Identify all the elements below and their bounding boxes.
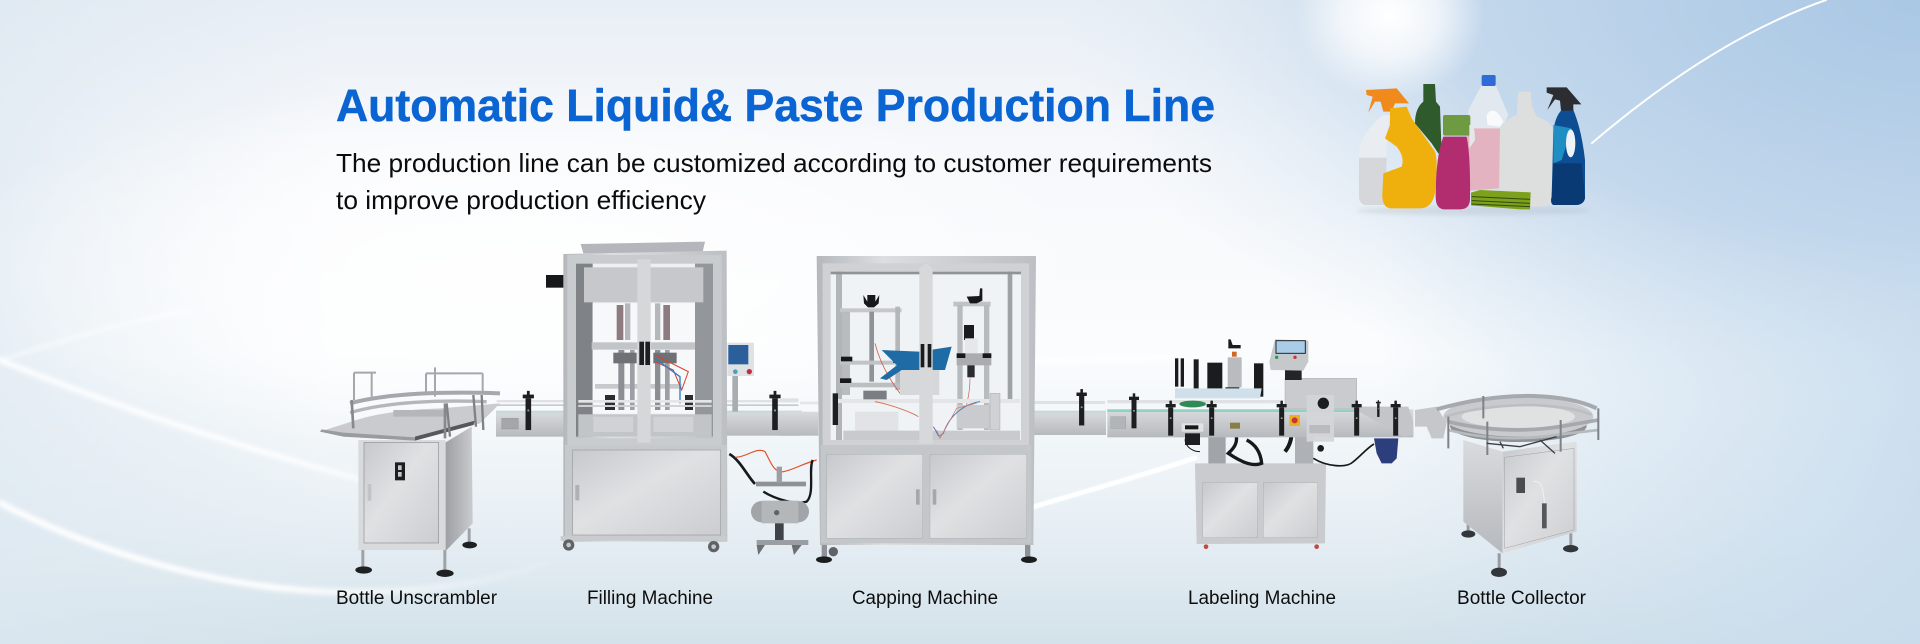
blue hopper [880,347,952,395]
label: bottle collector: Bottle Collector [1457,588,1587,609]
guide assembly [1307,395,1334,452]
door frame [572,259,717,443]
cabinet [1463,440,1577,553]
clamps [1129,393,1401,436]
machine: filling machine [496,242,817,555]
cabinet front [358,440,446,550]
infeed conveyor [496,391,566,437]
legs and feet [355,528,477,577]
pink jug [1467,75,1508,191]
hopper lid [581,242,705,253]
cabinet [1195,463,1326,549]
right capping head [953,288,991,430]
outfeed conveyor [727,391,802,436]
base columns [1208,437,1226,473]
hoses [1185,413,1374,466]
bottle shadow [1357,206,1590,215]
door frame [827,267,1025,444]
touch screen [1269,339,1308,380]
hopper [584,267,703,302]
machine: labeling machine [1107,339,1413,549]
stub conveyor [780,398,818,436]
label heads [1175,339,1263,407]
subtitle: to improve production efficiency [336,185,706,215]
wheels [561,536,727,552]
magenta bottle [1436,115,1475,209]
hoses and diaphragm pump [729,450,817,555]
lower cabinet [565,445,727,540]
frame [817,256,1036,545]
table and rails [833,391,1020,441]
white spray bottle [1359,115,1390,205]
blue motor [1374,438,1398,463]
subtitle: The production line can be customized according to customer requirements [336,148,1212,178]
feet [1461,520,1578,577]
machine: bottle unscrambler [320,367,500,577]
cabinet side [444,427,473,552]
label unit [1182,423,1240,445]
emergency stop box [1289,415,1300,426]
title: Automatic Liquid& Paste Production Line [336,80,1215,131]
label: bottle unscrambler: Bottle Unscrambler [336,588,498,609]
turntable [1437,396,1598,455]
window [576,263,713,437]
label: capping machine: Capping Machine [852,588,998,609]
guide rails [350,367,500,438]
motor box [546,275,564,288]
conveyor [1107,400,1413,437]
feet [816,545,1037,563]
machine: bottle collector [1415,396,1598,577]
window [830,272,1022,442]
icon: cleaning product bottles [1357,75,1590,215]
left capping column [840,295,903,395]
chute [1415,407,1447,438]
white jug [1500,92,1553,207]
touch panel [727,343,754,412]
rear box [1285,378,1357,409]
lower cabinet [821,445,1031,543]
conveyor through window [578,400,712,403]
yellow bottle [1382,107,1437,208]
green bottle [1415,84,1442,153]
filling heads [592,303,695,410]
tray table [320,403,500,441]
subtitle [336,148,1212,215]
outfeed conveyor [1033,389,1106,435]
label: filling machine: Filling Machine [587,588,713,609]
label: labeling machine: Labeling Machine [1188,588,1336,609]
sponge [1471,190,1531,209]
blue spray bottle [1547,87,1585,205]
frame [563,251,727,542]
machine: capping machine [780,256,1106,563]
orange trigger [1366,88,1409,113]
